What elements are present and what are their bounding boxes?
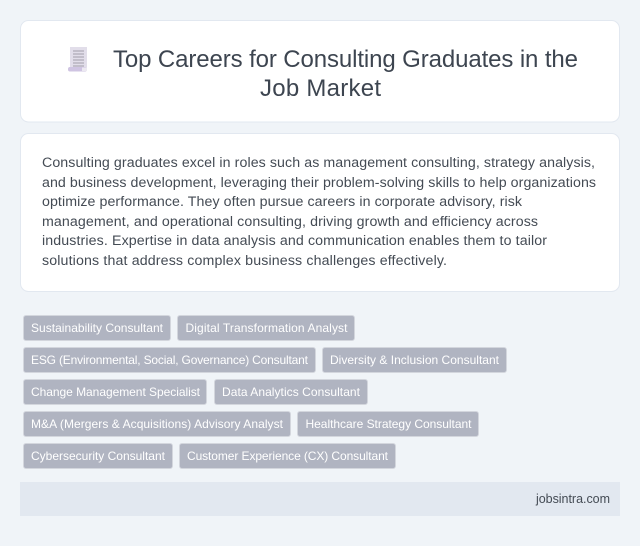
tag: ESG (Environmental, Social, Governance) Consultant	[31, 353, 309, 367]
tag: Data Analytics Consultant	[222, 385, 361, 399]
text block: description	[42, 155, 596, 269]
tag: Customer Experience (CX) Consultant	[187, 449, 389, 463]
title	[113, 46, 578, 102]
text block: description: optimize performance. They often pursue careers in corporate advisory, risk	[42, 194, 523, 210]
text block: description: management, and operational consulting, driving growth and efficiency across	[42, 214, 538, 230]
tag: M&A (Mergers & Acquisitions) Advisory Analyst	[31, 417, 284, 431]
tag	[180, 444, 396, 468]
panel: description	[20, 134, 620, 292]
text block: description: industries. Expertise in data analysis and communication enables them to tailor	[42, 233, 547, 249]
tag	[178, 316, 354, 340]
tag	[298, 412, 478, 436]
tag: Change Management Specialist	[31, 385, 201, 399]
tag: Digital Transformation Analyst	[186, 321, 348, 335]
tag	[322, 348, 506, 372]
tag	[24, 348, 316, 372]
panel: header	[20, 20, 620, 122]
footer	[20, 482, 620, 516]
title: Job Market	[260, 75, 381, 102]
text block: description: solutions that address complex business challenges effectively.	[42, 253, 447, 269]
footer: jobsintra.com	[535, 492, 610, 506]
tag	[214, 380, 368, 404]
tag: Diversity & Inclusion Consultant	[330, 353, 500, 367]
tag: Sustainability Consultant	[31, 321, 164, 335]
tag	[24, 316, 170, 340]
tags	[24, 316, 506, 468]
text block: description: and business development, leveraging their problem-solving skills to help organizations	[42, 175, 596, 191]
title: Top Careers for Consulting Graduates in the	[113, 46, 578, 73]
tag	[24, 412, 290, 436]
icon: document scroll	[68, 47, 87, 72]
tag	[24, 380, 206, 404]
tag	[24, 444, 172, 468]
text block: description: Consulting graduates excel in roles such as management consulting, strategy analysis,	[42, 155, 595, 171]
tag: Healthcare Strategy Consultant	[306, 417, 472, 431]
tag: Cybersecurity Consultant	[31, 449, 166, 463]
